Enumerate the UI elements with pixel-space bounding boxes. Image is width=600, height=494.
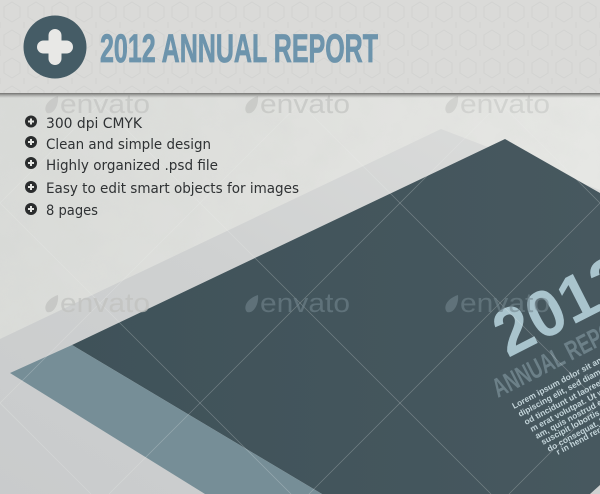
envato watermarks xyxy=(45,89,550,318)
watermark lower left: envato xyxy=(60,288,150,318)
item: 300 dpi CMYK: 300 dpi CMYK xyxy=(46,116,143,132)
title: 2012 ANNUAL REPORT xyxy=(100,27,378,71)
slate cover panel xyxy=(72,139,600,494)
icon: plus badge xyxy=(24,16,86,78)
feature list xyxy=(25,116,299,219)
watermark top left: envato xyxy=(60,89,150,119)
item: clean design: Clean and simple design xyxy=(46,137,211,153)
watermark lower right: envato xyxy=(460,288,550,318)
cover body text xyxy=(510,350,600,457)
watermark top right: envato xyxy=(460,89,550,119)
item: 8 pages: 8 pages xyxy=(46,203,98,219)
item: smart objects: Easy to edit smart objects for images xyxy=(46,181,299,197)
watermark top middle: envato xyxy=(260,89,350,119)
item: organized file: Highly organized .psd file xyxy=(46,158,218,174)
header band xyxy=(0,0,600,98)
light back sheet xyxy=(0,129,600,494)
watermark lower middle: envato xyxy=(260,288,350,318)
item: 8 pages xyxy=(25,203,98,219)
teal spine band xyxy=(10,345,322,494)
report mockup xyxy=(0,129,600,494)
